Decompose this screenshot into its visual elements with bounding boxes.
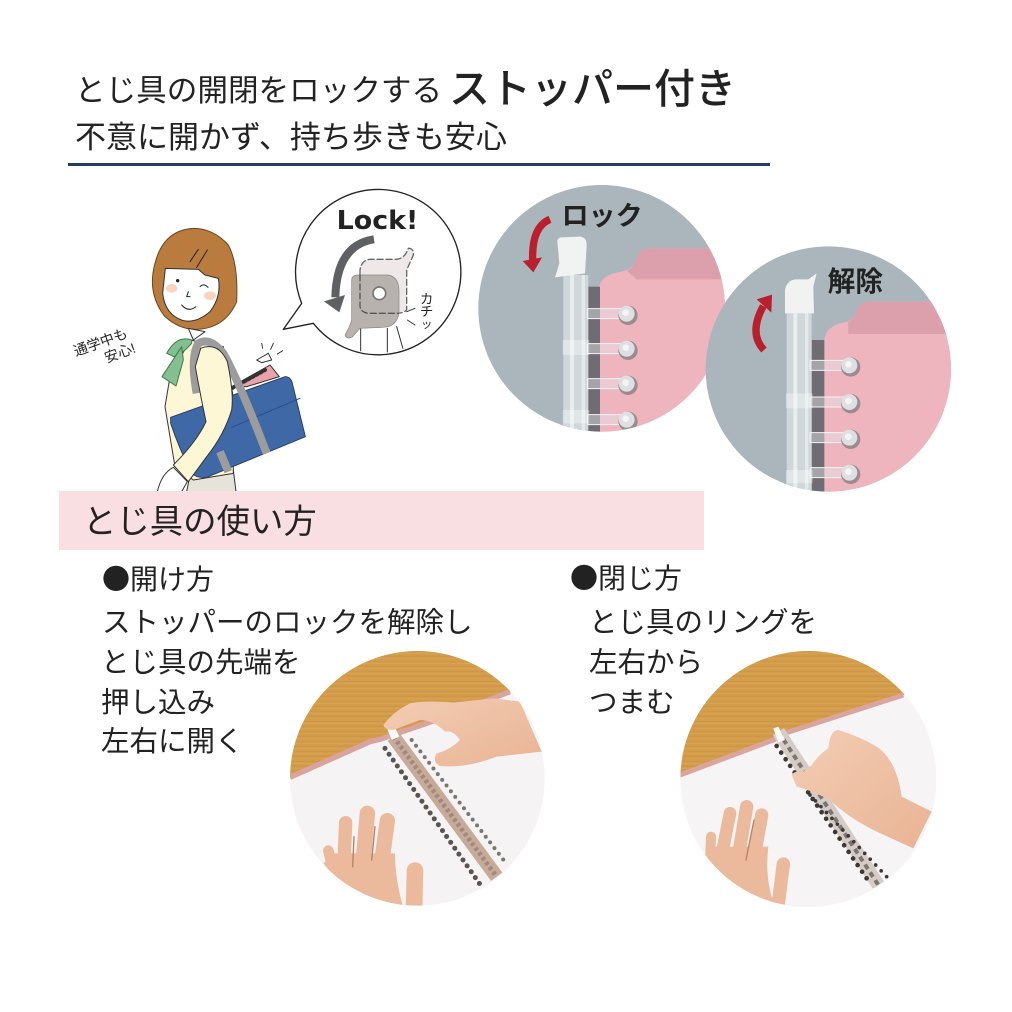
wood table xyxy=(290,651,510,776)
photos: lock and release xyxy=(470,180,957,497)
section band xyxy=(59,491,704,550)
close heading: ●閉じ方 xyxy=(570,557,682,597)
sleeve xyxy=(173,347,232,482)
photo: closing the binder xyxy=(680,651,936,907)
pink divider xyxy=(824,302,957,497)
open heading: ●開け方 xyxy=(102,558,214,598)
open instructions: 押し込み xyxy=(101,687,215,719)
how to close text xyxy=(570,557,817,719)
collar xyxy=(188,328,205,340)
click ticks xyxy=(407,308,415,325)
binding spine xyxy=(786,313,824,497)
heading underline xyxy=(68,163,770,166)
stopper head xyxy=(555,237,587,277)
grey rotation arrow xyxy=(324,239,374,312)
caption: safe while commuting: 通学中も xyxy=(71,325,130,359)
red arrow xyxy=(756,295,772,350)
photo: opening the binder xyxy=(290,651,544,906)
rings xyxy=(587,306,638,431)
rings xyxy=(810,357,860,484)
stopper tip xyxy=(773,727,785,743)
wood table xyxy=(680,651,904,775)
bubble contents xyxy=(324,206,433,353)
pink cover edge xyxy=(680,695,903,775)
close instructions xyxy=(589,607,817,719)
lower strap xyxy=(220,452,228,472)
caption: safe while commuting: 安心! xyxy=(102,340,138,366)
pink divider xyxy=(598,248,725,432)
torso xyxy=(165,340,233,480)
bubble contents: ッ xyxy=(421,319,432,331)
notebook page xyxy=(290,692,544,906)
binding strip xyxy=(385,737,507,887)
close instructions: つまむ xyxy=(589,687,675,719)
notebook page xyxy=(680,695,936,907)
caption: safe while commuting xyxy=(71,324,138,375)
open instructions: 左右に開く xyxy=(101,726,244,758)
photo: lock xyxy=(478,185,725,432)
binding strip xyxy=(777,732,887,885)
stopper dashed overlay xyxy=(360,275,398,313)
close instructions: 左右から xyxy=(589,647,703,679)
stopper hole xyxy=(373,287,386,300)
face xyxy=(163,268,219,321)
lower hand xyxy=(323,813,415,910)
close instructions: とじ具のリングを xyxy=(589,607,817,639)
lock label: ロック xyxy=(562,201,643,231)
bow xyxy=(162,339,192,386)
binder spine lines xyxy=(361,327,403,353)
open instructions xyxy=(101,607,473,758)
click sound text: カ xyxy=(420,291,433,306)
photo: release xyxy=(703,243,957,497)
upper hand xyxy=(792,730,932,848)
heading xyxy=(75,66,736,155)
infographic canvas xyxy=(59,68,951,907)
shoulder strap xyxy=(194,341,267,453)
heading line 1: ストッパー付き xyxy=(449,66,736,112)
illustration: student carrying bag xyxy=(71,189,461,492)
dashed unlocked position xyxy=(360,248,413,313)
lock text: Lock! xyxy=(337,206,418,236)
stopper shape xyxy=(345,275,399,338)
release label: 解除 xyxy=(828,266,883,297)
hair xyxy=(152,228,237,329)
open instructions: とじ具の先端を xyxy=(101,647,301,679)
hand xyxy=(157,467,187,492)
open instructions: ストッパーのロックを解除し xyxy=(102,607,473,639)
heading line 1: とじ具の開閉をロックする xyxy=(75,74,442,108)
binder in bag xyxy=(232,343,283,388)
blue bag xyxy=(171,377,305,477)
binding spine xyxy=(563,275,600,435)
cheeks and features xyxy=(166,249,216,309)
heading line 2: 不意に開かず、持ち歩きも安心 xyxy=(75,120,507,155)
bag seam xyxy=(232,398,300,427)
stopper tip xyxy=(387,727,399,740)
stopper head xyxy=(785,273,817,313)
lower hand xyxy=(706,807,785,910)
red arrow xyxy=(523,219,550,272)
pink cover edge xyxy=(290,692,510,777)
skirt xyxy=(187,470,236,492)
how to open text xyxy=(101,558,473,758)
speech bubble xyxy=(283,189,461,355)
upper hand xyxy=(383,698,542,766)
bubble contents: チ xyxy=(420,304,433,319)
heading line 1 xyxy=(75,66,736,112)
section title: とじ具の使い方 xyxy=(83,504,317,541)
